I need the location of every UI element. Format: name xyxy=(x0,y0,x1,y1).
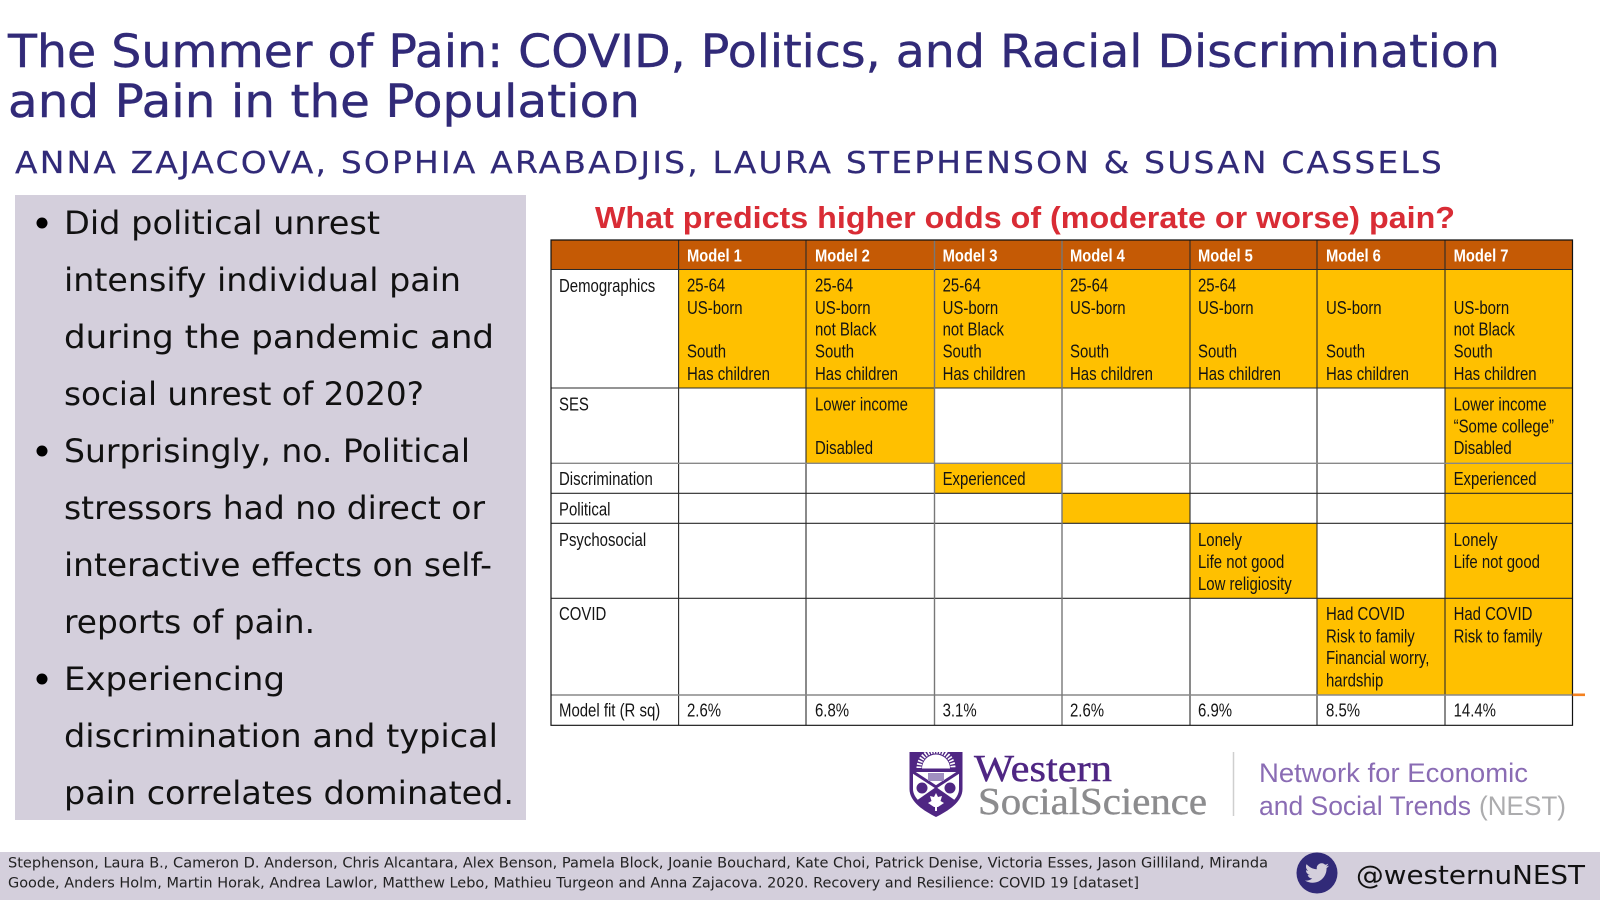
model 7 column: Lonely xyxy=(1454,530,1498,550)
model 3 column: South xyxy=(943,341,982,362)
model 6 column: 8.5% xyxy=(1326,700,1360,721)
model 6 column: Had COVID xyxy=(1326,604,1405,624)
row labels: Political xyxy=(559,499,610,520)
row labels: Demographics xyxy=(559,276,655,296)
row labels: COVID xyxy=(559,604,606,624)
model 5 column: Has children xyxy=(1198,364,1281,384)
bullet: political unrest question: Did political unrest xyxy=(64,204,380,242)
logo: NEST wordmark: and Social Trends xyxy=(1259,791,1471,821)
row labels: Psychosocial xyxy=(559,530,646,550)
title: The Summer of Pain: COVID, Politics, and Racial Discrimination xyxy=(7,25,1500,78)
bullet: discrimination dominated: discrimination and typical xyxy=(64,717,498,755)
highlighted cells xyxy=(679,270,1572,695)
model 4 column: Has children xyxy=(1070,364,1153,384)
model 5 column: Life not good xyxy=(1198,552,1284,572)
bullet: surprisingly no xyxy=(36,432,492,641)
model 4 column: South xyxy=(1070,341,1109,362)
model 4 column: 25-64 xyxy=(1070,275,1108,296)
logo: Western Social Science wordmark: Western xyxy=(974,748,1112,790)
model 2 column: not Black xyxy=(815,319,877,340)
model 7 column: “Some college” xyxy=(1454,416,1554,437)
model 7 column: Had COVID xyxy=(1454,604,1532,624)
bullet: discrimination dominated: pain correlates dominated. xyxy=(64,774,514,812)
citation xyxy=(8,856,1268,892)
model 3 column: not Black xyxy=(943,319,1005,340)
model 7 column xyxy=(1454,298,1554,721)
model 5 column: US-born xyxy=(1198,298,1254,318)
model 2 column: 25-64 xyxy=(815,275,853,296)
bullet: surprisingly no: Surprisingly, no. Political xyxy=(64,432,470,470)
model 7 column: South xyxy=(1454,341,1493,362)
model 1 column: South xyxy=(687,341,726,362)
model 7 column: Risk to family xyxy=(1454,626,1543,647)
title xyxy=(7,25,1500,128)
icon: twitter xyxy=(1296,852,1338,894)
model 7 column: 14.4% xyxy=(1454,700,1496,721)
model 7 column: Has children xyxy=(1454,364,1537,384)
model 6 column: US-born xyxy=(1326,298,1382,318)
model 2 column: South xyxy=(815,341,854,362)
model 4 column: US-born xyxy=(1070,298,1126,318)
model 5 column: 25-64 xyxy=(1198,275,1236,296)
model 1 column: US-born xyxy=(687,298,743,318)
title: and Pain in the Population xyxy=(8,75,640,128)
icon: Western shield logo xyxy=(910,751,962,817)
model 3 column: 3.1% xyxy=(943,700,977,721)
model 7 column: not Black xyxy=(1454,319,1516,340)
panel: key findings xyxy=(15,195,526,820)
model 6 column: Risk to family xyxy=(1326,626,1415,647)
logo: Western Social Science wordmark: SocialScience xyxy=(978,781,1207,823)
bullet: surprisingly no: stressors had no direct or xyxy=(64,489,486,527)
footer band xyxy=(0,852,1600,900)
table header row: Model 3 xyxy=(943,246,997,266)
model 3 column: Experienced xyxy=(943,469,1026,489)
model 7 column: Disabled xyxy=(1454,438,1512,458)
table header row: Model 2 xyxy=(815,246,870,266)
table: model predictors xyxy=(551,240,1585,725)
citation: Goode, Anders Holm, Martin Horak, Andrea Lawlor, Matthew Lebo, Mathieu Turgeon and Anna Zajacova. 2020. Recovery and Resilience: COVID 19 [dataset] xyxy=(8,876,1139,892)
model 5 column: Low religiosity xyxy=(1198,574,1292,594)
model 6 column: Has children xyxy=(1326,364,1409,384)
logo: NEST wordmark: Network for Economic xyxy=(1259,758,1528,788)
table header row xyxy=(551,240,1572,270)
model 3 column xyxy=(943,275,1026,721)
model 3 column: US-born xyxy=(943,298,998,318)
model 2 column: Lower income xyxy=(815,394,908,415)
model 7 column: Lower income xyxy=(1454,394,1547,415)
bullet: political unrest question: during the pandemic and xyxy=(64,318,494,356)
bullet: political unrest question: social unrest of 2020? xyxy=(64,375,424,413)
model 6 column xyxy=(1326,298,1429,721)
citation: Stephenson, Laura B., Cameron D. Anderson, Chris Alcantara, Alex Benson, Pamela Block, Joanie Bouchard, Kate Choi, Patrick Denise, Victoria Esses, Jason Gilliland, Miranda xyxy=(8,856,1268,872)
bullet: surprisingly no: interactive effects on self- xyxy=(64,546,492,584)
model 4 column: 2.6% xyxy=(1070,700,1104,721)
table header row: Model 1 xyxy=(687,246,742,266)
logo: NEST wordmark: (NEST) xyxy=(1479,791,1566,821)
model 5 column: Lonely xyxy=(1198,530,1243,550)
bullet: political unrest question xyxy=(36,204,494,413)
bullet: discrimination dominated: Experiencing xyxy=(64,660,285,698)
chart heading: What predicts higher odds of (moderate or worse) pain? xyxy=(595,200,1455,235)
model 6 column: hardship xyxy=(1326,670,1383,691)
model 1 column: 2.6% xyxy=(687,700,721,721)
model 6 column: Financial worry, xyxy=(1326,648,1429,668)
bullet: surprisingly no: reports of pain. xyxy=(64,603,315,641)
row labels: SES xyxy=(559,394,589,415)
table header row: Model 4 xyxy=(1070,246,1126,266)
model 3 column: 25-64 xyxy=(943,275,981,296)
model 5 column: 6.9% xyxy=(1198,700,1232,721)
table header row: Model 6 xyxy=(1326,246,1381,266)
model 2 column: US-born xyxy=(815,298,871,318)
twitter handle: @westernuNEST xyxy=(1356,861,1585,891)
model 2 column: Disabled xyxy=(815,438,873,458)
model 2 column: Has children xyxy=(815,364,898,384)
model 1 column xyxy=(687,275,770,721)
row labels xyxy=(559,276,660,721)
model 4 column xyxy=(1070,275,1153,721)
row labels: Model fit (R sq) xyxy=(559,700,660,721)
bullet: political unrest question: intensify individual pain xyxy=(64,261,461,299)
model 6 column: South xyxy=(1326,341,1365,362)
table header row: Model 5 xyxy=(1198,246,1253,266)
model 5 column: South xyxy=(1198,341,1237,362)
table header row: Model 7 xyxy=(1454,246,1508,266)
model 1 column: Has children xyxy=(687,364,770,384)
model 5 column xyxy=(1198,275,1292,721)
model 2 column: 6.8% xyxy=(815,700,849,721)
model 2 column xyxy=(815,275,908,721)
logo: NEST wordmark xyxy=(1259,758,1566,821)
authors: ANNA ZAJACOVA, SOPHIA ARABADJIS, LAURA STEPHENSON & SUSAN CASSELS xyxy=(15,146,1444,181)
bullet: discrimination dominated xyxy=(36,660,514,812)
row labels: Discrimination xyxy=(559,469,653,489)
model 1 column: 25-64 xyxy=(687,275,725,296)
model 3 column: Has children xyxy=(943,364,1026,384)
model 7 column: Experienced xyxy=(1454,469,1537,489)
model 7 column: US-born xyxy=(1454,298,1509,318)
model 7 column: Life not good xyxy=(1454,552,1540,572)
logo: Western Social Science wordmark xyxy=(974,748,1207,823)
